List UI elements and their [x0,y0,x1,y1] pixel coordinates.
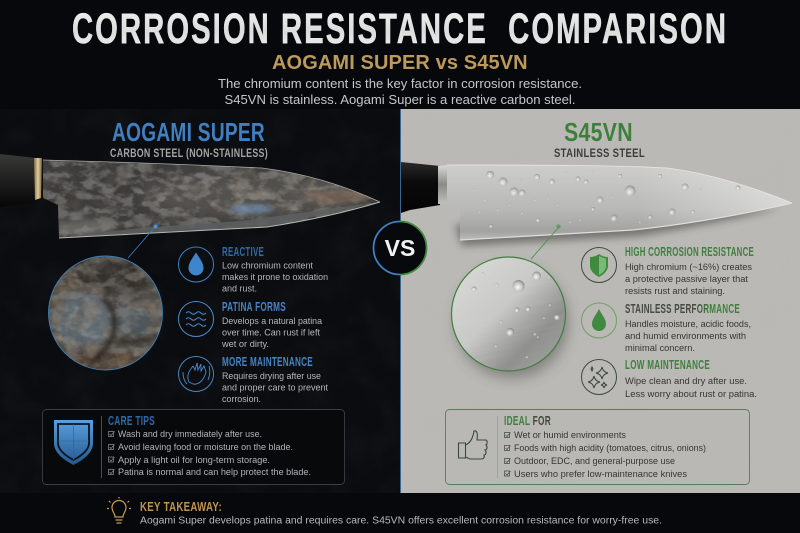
care tips list: Apply a light oil for long-term storage. [118,455,270,465]
footer: key takeaway [0,493,800,533]
ideal for heading: IDEAL FOR [504,414,551,428]
intro text: S45VN is stainless. Aogami Super is a reactive carbon steel. [224,92,576,107]
ideal for list: Foods with high acidity (tomatoes, citrus, onions) [514,443,706,453]
feature: more maintenance: and proper care to prevent [222,382,328,392]
VS badge: VS [385,235,415,261]
feature: stainless performance: minimal concern. [625,343,695,353]
panel: Aogami Super [0,109,400,493]
icon: sparkles [582,360,616,394]
icon: green shield [582,248,616,282]
ideal for list: Outdoor, EDC, and general-purpose use [514,456,675,466]
feature: low maintenance: Wipe clean and dry after use. [625,376,747,386]
icon: green drop [582,303,616,338]
icon: shield [54,420,93,465]
feature: more maintenance: MORE MAINTENANCE [222,355,313,369]
connector line [531,224,560,259]
feature: patina forms: PATINA FORMS [222,300,286,314]
feature: low maintenance: Less worry about rust or patina. [625,389,757,399]
detail circle: patina texture [48,255,165,374]
care tips box [42,410,344,484]
header [72,5,728,107]
feature: stainless performance: and humid environments with [625,331,746,341]
ideal for list [504,430,706,479]
care tips list: Avoid leaving food or moisture on the blade. [118,442,293,452]
subtitle: AOGAMI SUPER vs S45VN [272,52,528,74]
water droplets [473,171,740,228]
feature: high corrosion resistance [582,245,754,296]
knife: Aogami Super [0,154,385,245]
feature: more maintenance: Requires drying after use [222,371,321,381]
feature: stainless performance: STAINLESS PERFORMANCE [625,302,740,316]
feature: high corrosion resistance: High chromium (~16%) creates [625,262,753,272]
care tips list: Wash and dry immediately after use. [118,429,262,439]
feature: reactive: REACTIVE [222,245,264,259]
ideal for box [446,410,750,484]
feature: reactive [178,245,328,294]
care tips list: Patina is normal and can help protect the blade. [118,467,311,477]
icon: light bulb [107,497,131,523]
icon: thumbs up [458,431,487,459]
feature: more maintenance [178,355,328,404]
feature: reactive: makes it prone to oxidation [222,272,328,282]
feature: stainless performance: Handles moisture, acidic foods, [625,319,751,329]
panel subheading: stainless steel: STAINLESS STEEL [554,148,645,160]
feature: more maintenance: corrosion. [222,394,261,404]
feature: high corrosion resistance: a protective passive layer that [625,274,749,284]
icon: hand wiping [178,356,214,392]
feature: stainless performance [582,302,751,353]
care tips heading: CARE TIPS [108,414,155,428]
icon: waves [178,302,214,336]
feature: reactive: and rust. [222,284,257,294]
feature: patina forms: over time. Can rust if left [222,328,320,338]
feature: reactive: Low chromium content [222,260,313,270]
connector line [128,224,158,258]
panel heading: Aogami Super: AOGAMI SUPER [112,117,265,147]
ideal for list: Users who prefer low-maintenance knives [514,469,688,479]
feature: patina forms: Develops a natural patina [222,316,322,326]
detail circle: water beads on steel [450,256,574,384]
intro text [218,76,582,107]
feature: low maintenance: LOW MAINTENANCE [625,358,710,372]
feature: patina forms [178,300,322,349]
feature: low maintenance [582,358,757,399]
takeaway text: Aogami Super develops patina and requires care. S45VN offers excellent corrosion resistance for worry-free use. [140,516,662,526]
care tips list [108,429,311,477]
ideal for list: Wet or humid environments [514,430,626,440]
intro text: The chromium content is the key factor in corrosion resistance. [218,76,582,91]
knife: S45VN [401,162,792,246]
panel heading: S45VN: S45VN [564,117,633,147]
takeaway heading: KEY TAKEAWAY: [140,500,222,514]
panel subheading: carbon steel: CARBON STEEL (NON-STAINLESS) [110,148,268,160]
feature: patina forms: wet or dirty. [221,339,269,349]
icon: water drop [178,247,214,282]
panel: S45VN [400,109,800,493]
feature: high corrosion resistance: resists rust and staining. [625,286,725,296]
VS badge [374,222,426,274]
